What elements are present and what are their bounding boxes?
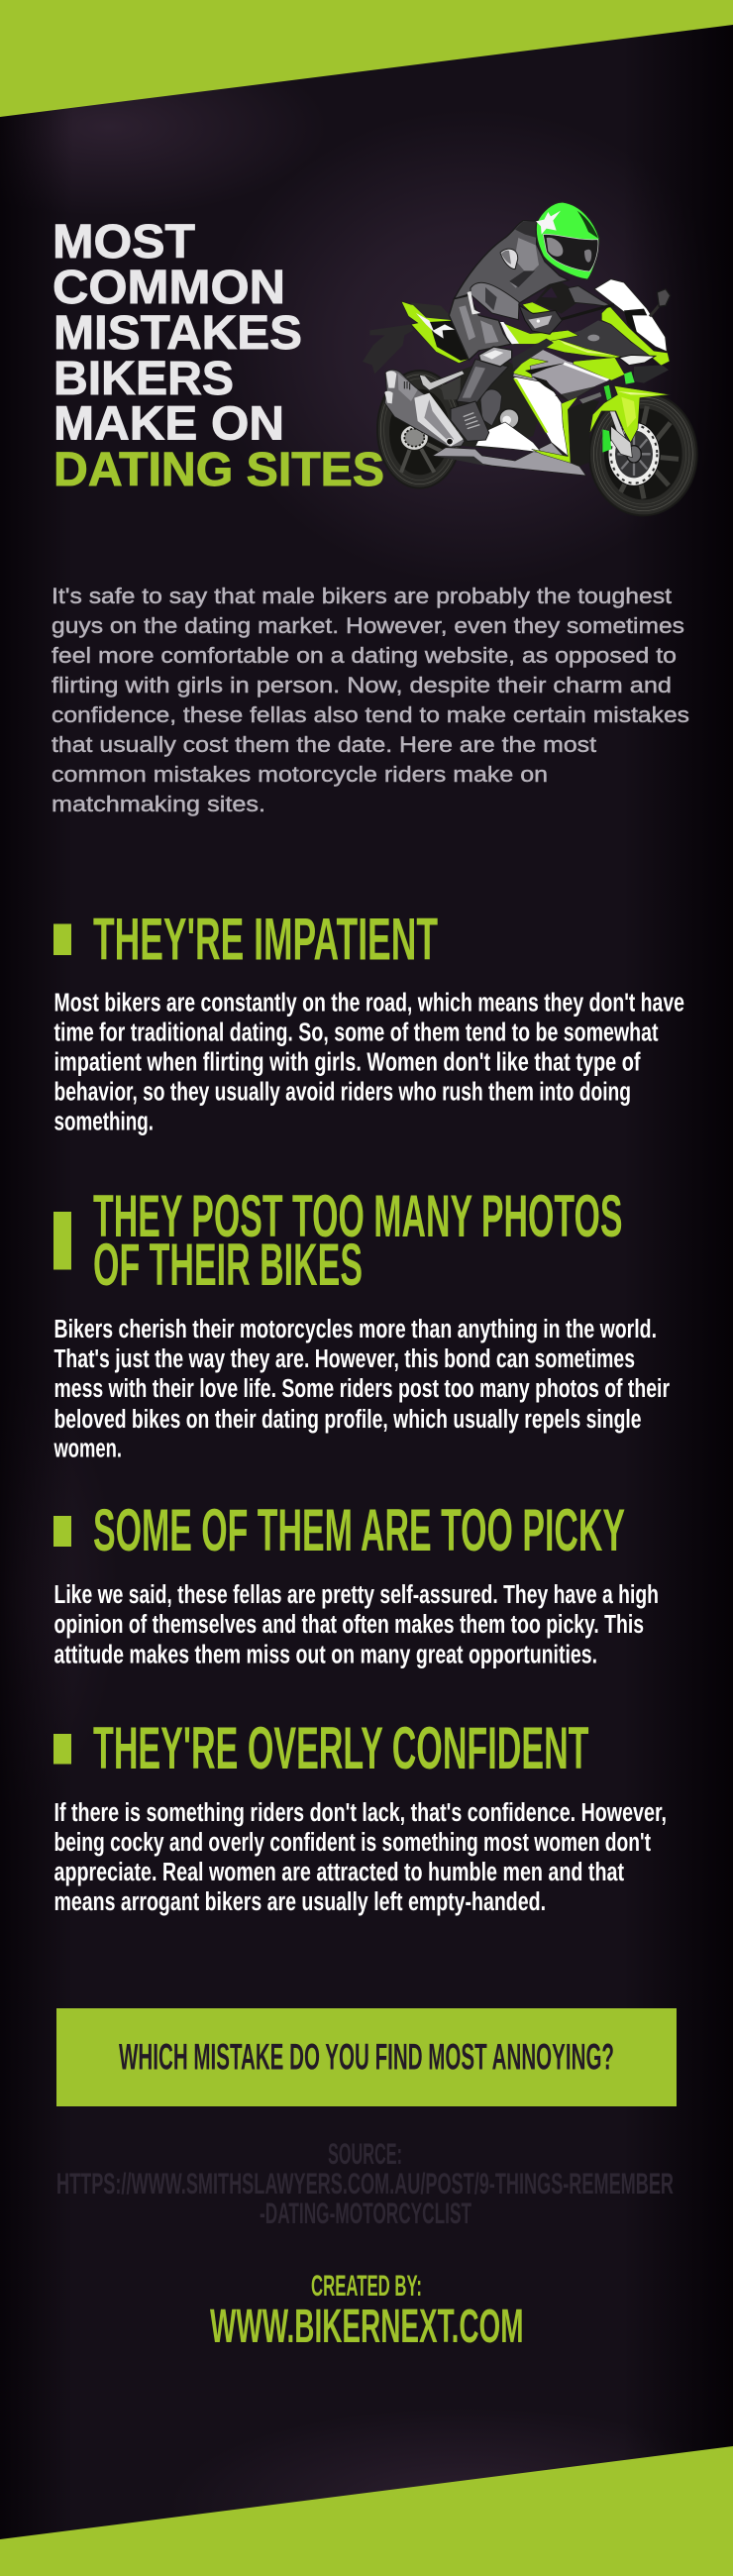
icon: green side line [513,378,548,433]
icon: bright green block [624,372,635,384]
icon: leg highlight [463,367,485,398]
bullet [53,923,71,955]
icon: headlight [619,355,656,366]
intro paragraph: confidence, these fellas also tend to make certain mistakes [52,702,689,727]
icon: radiator fins [579,392,601,403]
title: DATING SITES [53,444,384,496]
body text [53,1581,659,1668]
icon: handlebar [560,304,614,320]
body text: something. [53,1108,154,1135]
icon: torso [454,221,569,304]
icon: belly pan [433,443,586,476]
intro paragraph: matchmaking sites. [52,792,265,816]
bullet [53,1212,71,1270]
icon: boot [451,401,489,441]
icon: brake unit [611,426,632,458]
icon: front half of bike [433,279,697,515]
intro paragraph: flirting with girls in person. Now, despite their charm and [52,673,672,698]
icon: green lower band [573,358,625,380]
source: SOURCE: [328,2138,402,2171]
credit: CREATED BY: [311,2270,422,2303]
icon: rear wheel [377,371,462,488]
title: MOST [52,216,195,268]
icon: arm folds [485,287,497,310]
icon: arm [471,282,519,320]
intro paragraph: feel more comfortable on a dating website, as opposed to [52,643,677,668]
icon: green upper fairing band [541,339,621,358]
icon: chest shadow [509,270,535,287]
icon: front mudguard [589,385,671,443]
body text [53,1316,670,1462]
icon: green nose fairing [601,305,670,366]
icon: rider leg [451,339,554,441]
body text: women. [53,1435,122,1462]
intro paragraph [52,584,689,816]
icon: armour shadow [501,251,511,265]
credit [210,2270,523,2353]
icon: shoulder armour [500,249,518,269]
icon: helmet [536,202,599,279]
icon: exhaust [384,370,465,447]
icon: glove [519,305,562,334]
intro paragraph: that usually cost them the date. Here are the most [52,732,596,757]
icon: rear half of bike [363,301,540,488]
icon: green lower trim [532,397,577,463]
title: COMMON [52,262,285,314]
icon: green left spike [513,358,548,378]
icon: nose dark panel [557,320,658,358]
intro paragraph: common mistakes motorcycle riders make on [52,762,548,787]
icon: frame and engine [419,355,540,449]
icon: white lower panel [513,376,570,458]
title [52,216,384,496]
icon: dark frame behind wheel [568,399,599,467]
icon: white engine cover [475,422,542,453]
body text [53,989,684,1135]
title: BIKERS [53,353,234,405]
bullet [53,1734,71,1764]
icon: belt [468,291,480,314]
icon: knee armour [478,347,512,367]
icon: mirror [650,289,671,316]
icon: green tank [522,302,556,313]
body text [53,1799,667,1916]
body text: means arrogant bikers are usually left empty-handed. [53,1888,546,1916]
icon: tank and dark gap [535,278,577,314]
icon: lower leg [457,360,508,403]
icon: windscreen black [624,309,647,336]
intro paragraph: It's safe to say that male bikers are probably the toughest [52,584,672,608]
icon: thigh folds [459,305,498,344]
heading [93,1183,622,1298]
icon: collar [515,221,537,238]
icon: black strip under tank [512,339,554,370]
icon: front wheel [589,392,697,515]
icon: black fairing streaks [532,376,557,393]
section 4: overly confident [53,1715,667,1916]
icon: rear tail tag [363,324,414,374]
section 3: too picky [53,1497,659,1668]
illustration: motorcycle rider [363,202,697,515]
icon: gray side panel [513,349,624,401]
icon: far arm [568,286,616,308]
icon: gap [542,287,558,298]
icon: chest highlights [509,238,539,288]
credit: WWW.BIKERNEXT.COM [210,2301,523,2353]
icon: windscreen [594,279,667,352]
icon: white tank [500,322,519,344]
title: MISTAKES [53,307,302,360]
icon: fork [603,384,631,457]
icon: chin dark [634,365,669,383]
icon: gill stripes [555,385,597,401]
top green banner [0,0,733,117]
icon: green fairing highlight [560,340,614,355]
intro paragraph: guys on the dating market. However, even they sometimes [52,613,684,638]
icon: seat tail [401,301,472,364]
heading: THEY'RE IMPATIENT [93,906,438,973]
icon: rider [449,202,616,360]
icon: tank lower [500,322,578,344]
source: -DATING-MOTORCYCLIST [260,2198,471,2230]
icon: white pinstripe [563,362,609,381]
icon: thigh [449,295,511,360]
icon: brake caliper [602,429,611,453]
section 2: too many photos [53,1183,670,1462]
section 1: they're impatient [53,906,684,1135]
icon: black long streak [525,363,567,375]
source [56,2138,674,2230]
bottom green banner [0,2446,733,2576]
icon: belly pan shadow [434,456,485,466]
icon: tank cap [587,335,599,341]
title: MAKE ON [53,398,284,450]
call to action box [56,2008,677,2106]
bullet [53,1516,71,1547]
heading: OF THEIR BIKES [93,1232,363,1298]
